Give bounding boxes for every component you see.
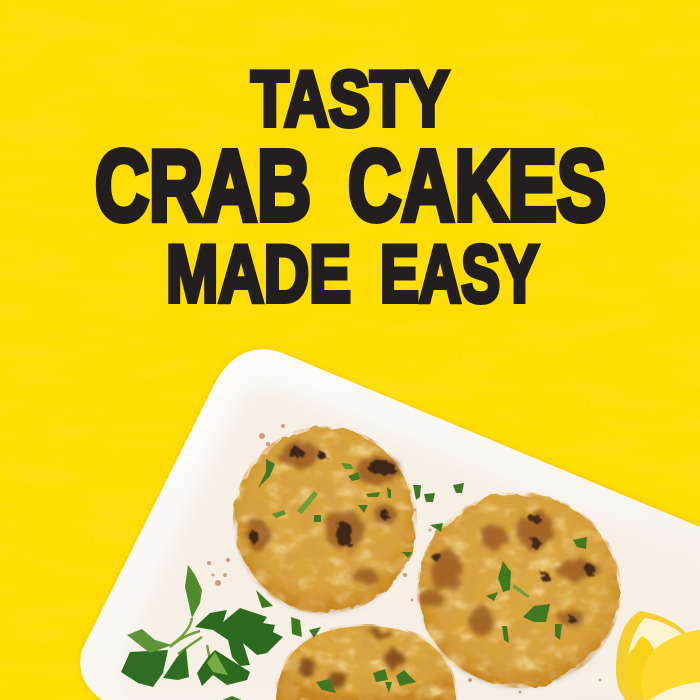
leaf: lower middle [163,648,189,680]
crab cake: right [415,490,625,690]
leaf: upper left [127,629,172,653]
title line: MADE EASY: MADE [166,230,351,320]
title line: CRAB CAKES [95,130,606,242]
title line: TASTY: TASTY [251,54,449,142]
leaf: highlight [207,652,228,675]
leaf: lower left [121,650,168,687]
crab cake: bottom [270,620,460,700]
title line: CRAB CAKES: CAKES [348,130,606,242]
lemon wedges [616,611,700,700]
charred spots [432,515,595,624]
charred spots [250,448,396,546]
browned halos [246,443,402,585]
title line: CRAB CAKES: CRAB [95,130,311,242]
plate [80,349,700,700]
title line: MADE EASY [166,230,539,320]
leaf: right [195,608,283,666]
parsley flecks [222,459,587,700]
title line: MADE EASY: EASY [380,230,539,320]
title [95,54,606,320]
leaf: top [185,565,202,618]
parsley sprig [121,565,283,687]
browned halos [418,510,600,634]
spice dust on plate [207,424,602,694]
leaf: lower right [197,650,250,686]
browned spots [298,629,403,689]
crab cake: left [230,425,420,615]
